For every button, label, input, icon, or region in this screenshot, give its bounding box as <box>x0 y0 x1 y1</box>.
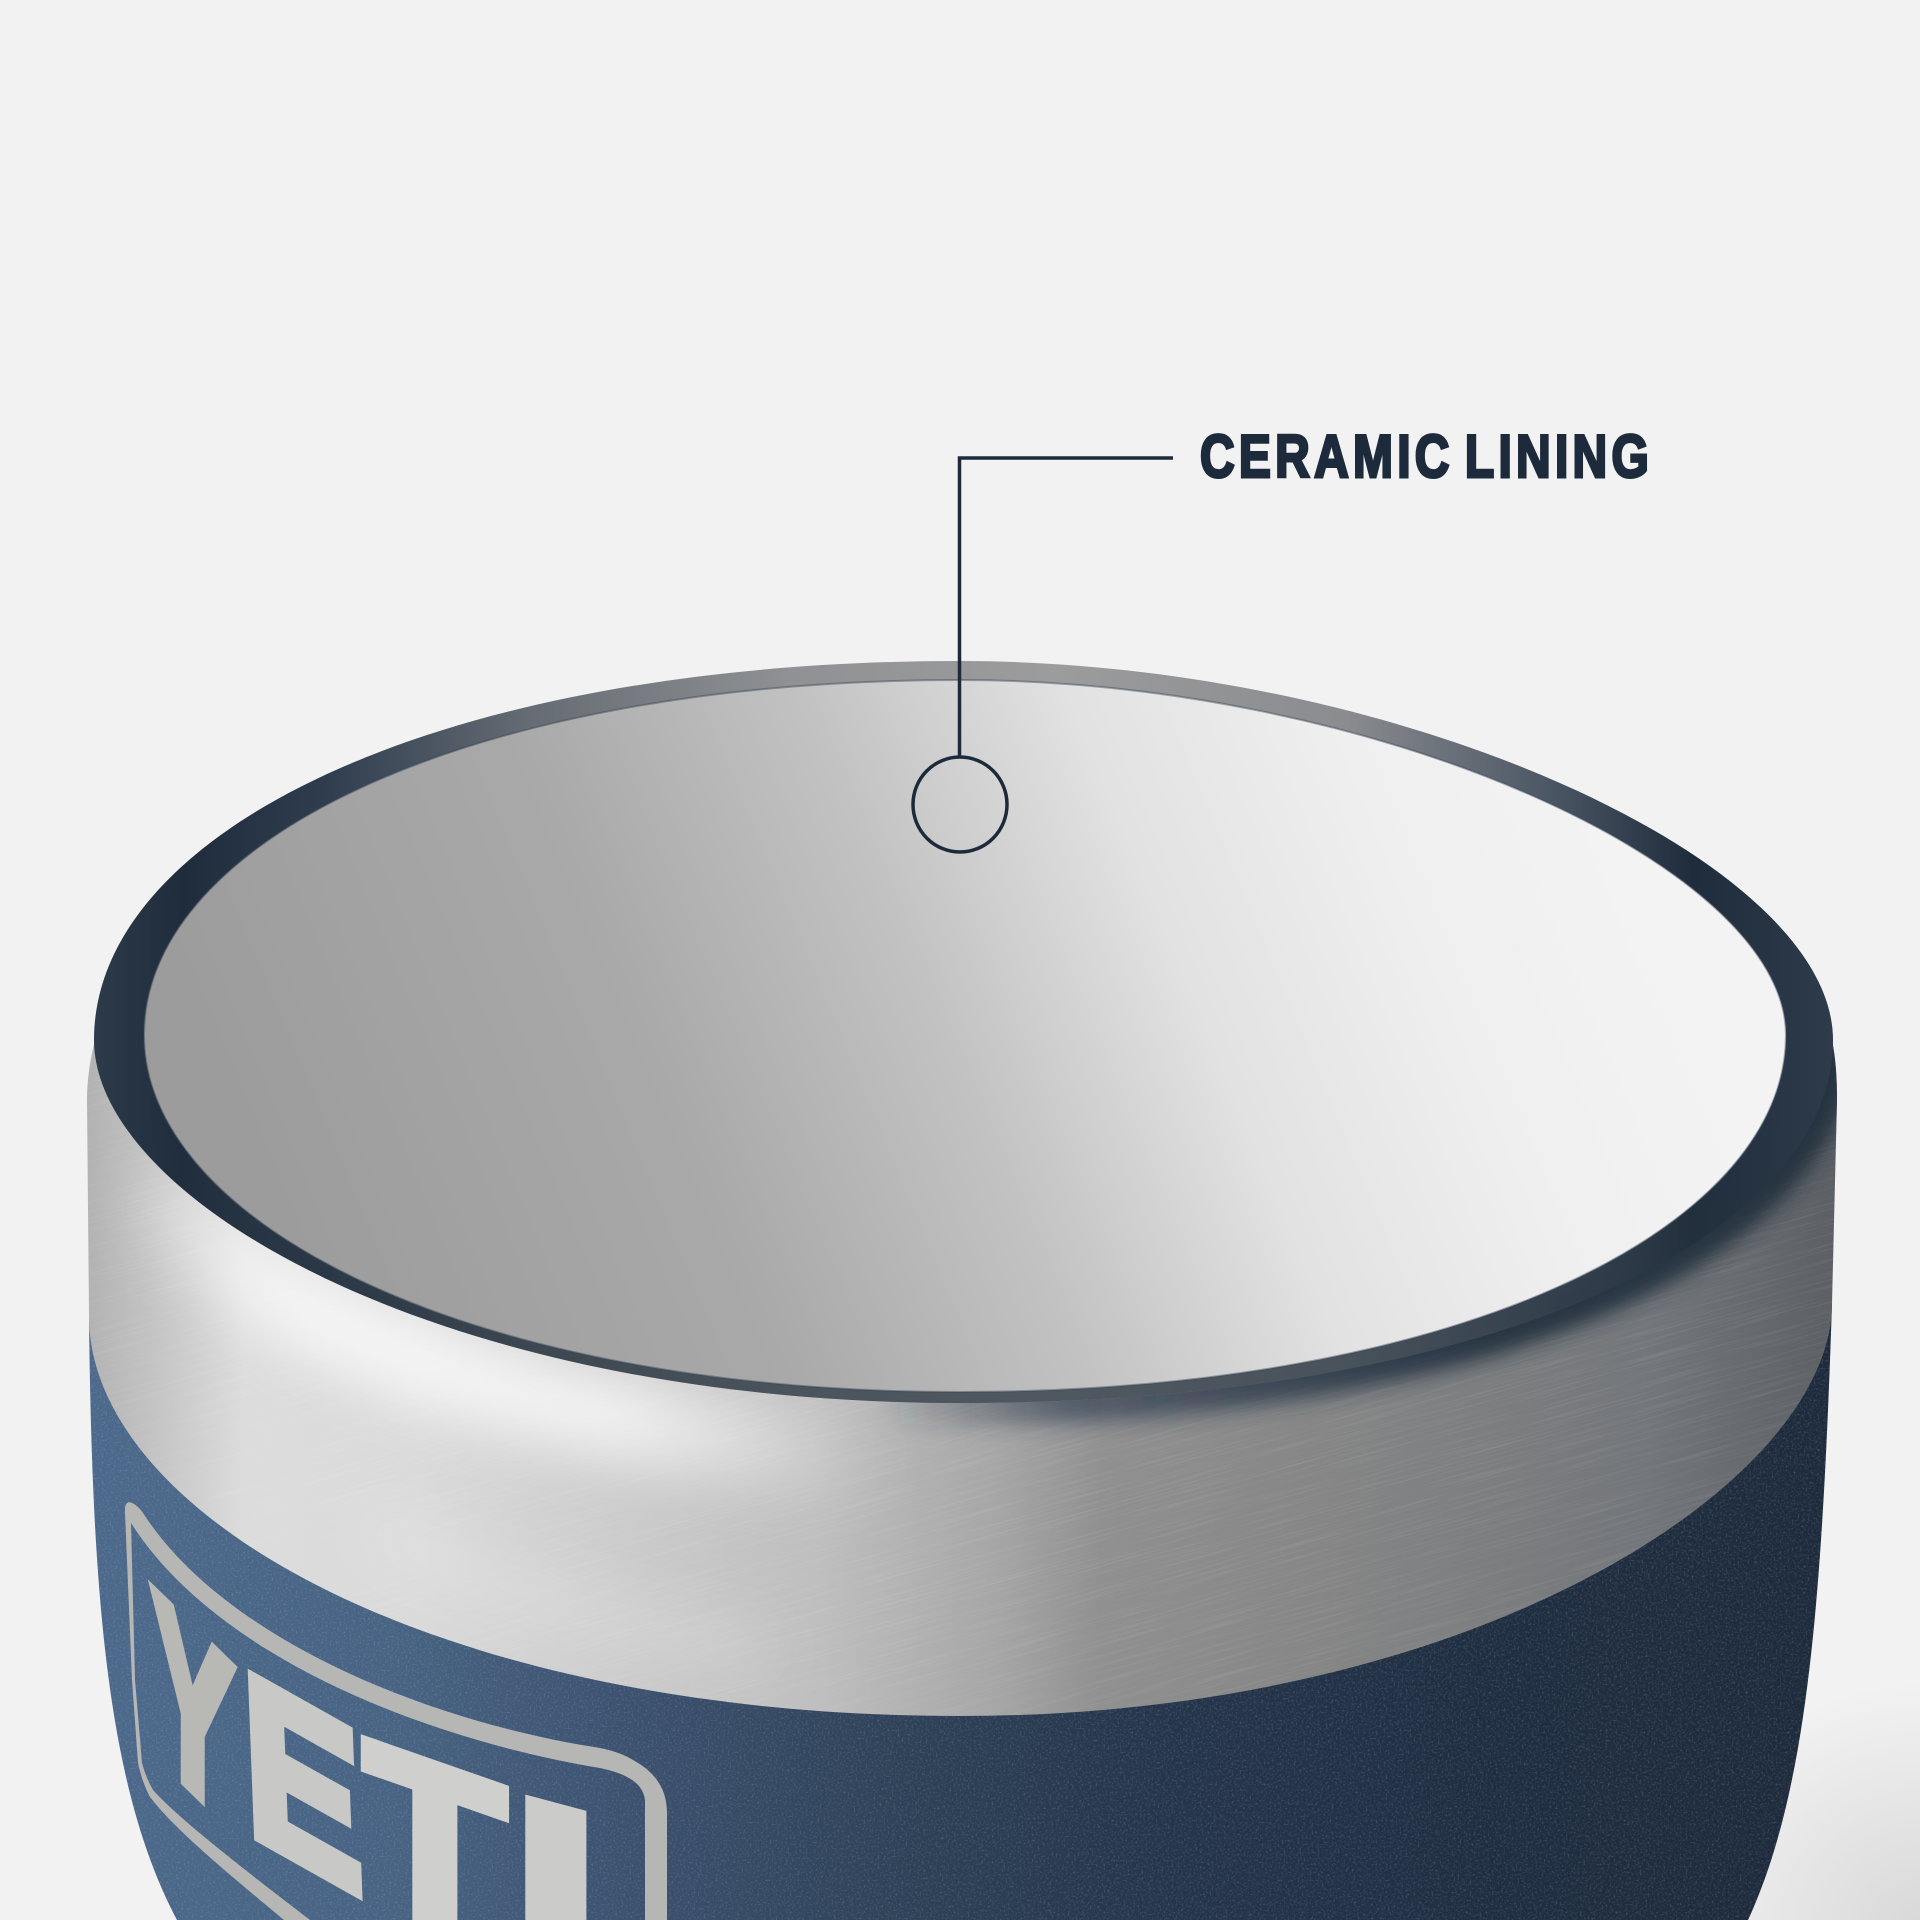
product: bowl <box>87 661 1837 1920</box>
ceramic lining interior <box>144 680 1786 1392</box>
stainless steel band <box>87 1044 1837 1716</box>
callout: ceramic lining <box>913 423 1649 852</box>
YETI logo: Y <box>151 1537 234 1880</box>
YETI logo <box>148 1579 586 1920</box>
infographic canvas <box>87 433 1920 1920</box>
coated body <box>80 1290 1850 1920</box>
badge outline <box>125 1502 667 1920</box>
label text: CERAMIC LINING <box>1200 423 1649 490</box>
rim <box>94 661 1833 1403</box>
floor shadow <box>1660 1670 1920 1920</box>
leader line <box>960 458 1173 757</box>
callout circle <box>913 757 1007 852</box>
